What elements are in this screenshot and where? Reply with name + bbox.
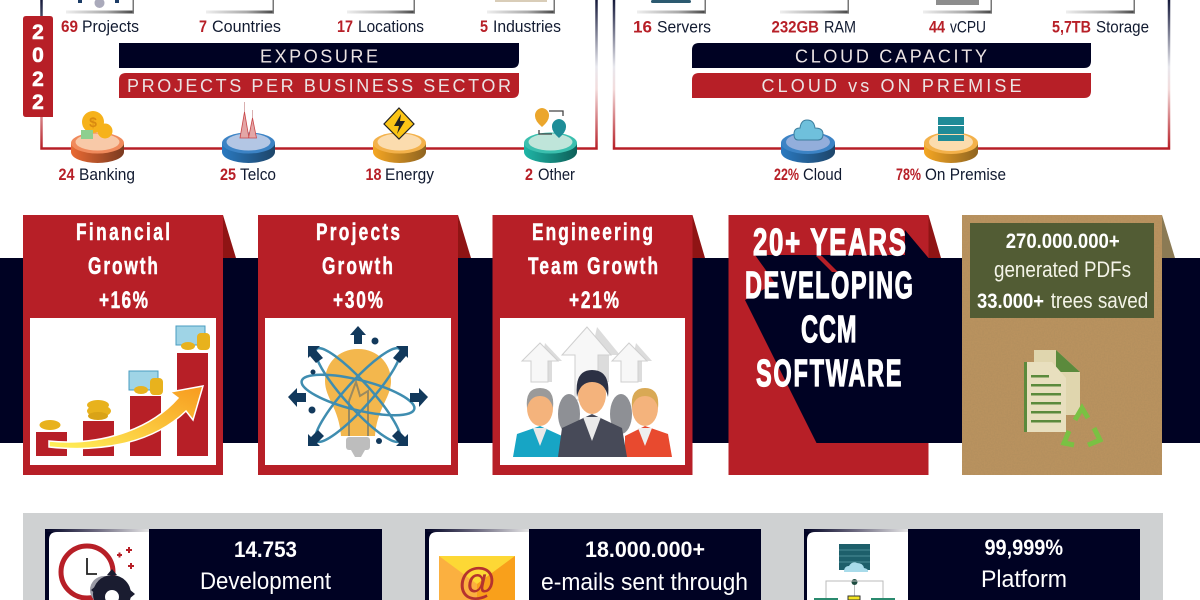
stat: 5,7TB storage: 5,7TB bbox=[1052, 18, 1091, 36]
heading: projects per business sector: PROJECTS PER BUSINESS SECTOR bbox=[127, 76, 511, 96]
card: financial growth: Growth bbox=[88, 253, 158, 280]
navy ribbon band bbox=[0, 258, 1200, 443]
stat: 16 servers bbox=[633, 18, 711, 36]
stat box: platform: Platform bbox=[981, 566, 1067, 593]
disc icon: banking: $ bbox=[89, 114, 97, 130]
stat: 7 countries: Countries bbox=[212, 17, 281, 36]
icon: light bulb with arrows bbox=[288, 326, 428, 457]
stat: 69 projects bbox=[61, 17, 139, 36]
stat box: platform bbox=[804, 529, 1140, 600]
year badge: 0 bbox=[32, 44, 44, 67]
stat box: e-mails: 18.000.000+ bbox=[585, 537, 705, 562]
heading: cloud vs on premise bbox=[692, 73, 1091, 98]
stat: 44 vCPU: vCPU bbox=[950, 18, 986, 36]
stat: 22% cloud: 22% bbox=[774, 165, 799, 184]
stat box: development: Development bbox=[200, 568, 331, 595]
heading: cloud vs on premise: CLOUD vs ON PREMISE bbox=[762, 76, 1022, 96]
stat box: e-mails: e-mails sent through bbox=[541, 569, 748, 596]
heading: cloud capacity: CLOUD CAPACITY bbox=[795, 46, 987, 66]
stat: 18 energy: 18 bbox=[366, 165, 382, 184]
card: financial growth bbox=[23, 215, 236, 475]
stat: 69 projects: 69 bbox=[61, 17, 78, 36]
green stat box bbox=[970, 223, 1154, 318]
icon: email envelope bbox=[439, 556, 515, 600]
disc icon: telco bbox=[222, 102, 275, 163]
card: projects growth: +30% bbox=[333, 287, 383, 314]
stat: 232GB RAM: RAM bbox=[824, 18, 856, 36]
top card: locations bbox=[347, 0, 415, 14]
stat: 78% on premise: On Premise bbox=[925, 165, 1006, 184]
panel: bottom statistics bbox=[23, 513, 1163, 600]
panel: cloud capacity bbox=[614, 0, 1169, 184]
disc icon: cloud bbox=[781, 120, 835, 163]
icon: team with arrows bbox=[513, 327, 672, 457]
icon: network diagram bbox=[814, 544, 895, 600]
stat: 2 other bbox=[525, 165, 575, 184]
icon: recycled documents bbox=[1024, 350, 1100, 445]
card: engineering team growth: Engineering bbox=[532, 219, 653, 246]
panel: exposure bbox=[23, 0, 596, 184]
stat: 16 servers: 16 bbox=[633, 18, 652, 36]
stat box: platform: 99,999% bbox=[984, 535, 1063, 560]
stat: 78% on premise: 78% bbox=[896, 165, 921, 184]
card: generated PDFs and trees saved bbox=[962, 215, 1175, 475]
top card: projects bbox=[66, 0, 134, 14]
card: engineering team growth: +21% bbox=[569, 287, 619, 314]
icon: clock and gear bbox=[61, 546, 135, 600]
stat: 2 other: Other bbox=[538, 165, 575, 184]
stat: 5 industries: Industries bbox=[493, 17, 561, 36]
year badge bbox=[23, 16, 53, 117]
card: projects growth: Projects bbox=[316, 219, 400, 246]
card: 20+ years developing CCM software: 20+ YEARS bbox=[753, 221, 906, 263]
stat: 25 telco: Telco bbox=[240, 165, 276, 184]
stat box: development: 14.753 bbox=[234, 537, 297, 562]
stat: 5,7TB storage bbox=[1052, 18, 1149, 36]
top card: ram bbox=[780, 0, 849, 14]
stat box: development bbox=[45, 529, 382, 600]
disc icon: banking bbox=[71, 111, 124, 163]
heading: cloud capacity bbox=[692, 43, 1091, 68]
stat: 232GB RAM bbox=[772, 18, 856, 36]
card: financial growth: +16% bbox=[99, 287, 148, 314]
stat: 25 telco: 25 bbox=[220, 165, 236, 184]
top card: servers bbox=[637, 0, 706, 14]
stat: 24 banking: Banking bbox=[79, 165, 135, 184]
stat: 24 banking bbox=[58, 165, 135, 184]
card: financial growth: Financial bbox=[76, 219, 170, 246]
stat box: e-mails bbox=[425, 529, 761, 600]
green stat box: 33.000+ bbox=[977, 290, 1044, 313]
heading: exposure bbox=[119, 43, 519, 68]
stat: 25 telco bbox=[220, 165, 276, 184]
card: 20+ years developing CCM software bbox=[728, 215, 941, 475]
stat: 44 vCPU bbox=[929, 18, 986, 36]
stat: 5 industries: 5 bbox=[480, 17, 488, 36]
green stat box: generated PDFs bbox=[994, 257, 1131, 282]
stat: 232GB RAM: 232GB bbox=[772, 18, 819, 36]
stat: 18 energy bbox=[366, 165, 434, 184]
top card: vcpu bbox=[923, 0, 992, 14]
card: engineering team growth: Team Growth bbox=[528, 253, 658, 280]
top card: industries bbox=[487, 0, 555, 14]
stat: 78% on premise bbox=[896, 165, 1006, 184]
top card: storage bbox=[1066, 0, 1135, 14]
stat: 18 energy: Energy bbox=[385, 165, 434, 184]
disc icon: on premise bbox=[924, 117, 978, 163]
year badge: 2 bbox=[32, 21, 44, 44]
disc icon: other bbox=[524, 108, 577, 163]
top card: countries bbox=[206, 0, 274, 14]
stat: 2 other: 2 bbox=[525, 165, 533, 184]
heading: exposure: EXPOSURE bbox=[260, 46, 378, 66]
year badge: 2 bbox=[32, 91, 44, 114]
year badge: 2 bbox=[32, 68, 44, 91]
card: 20+ years developing CCM software: DEVELOPING bbox=[745, 263, 913, 306]
chart: rising bars with coins bbox=[36, 326, 210, 456]
stat: 5,7TB storage: Storage bbox=[1096, 18, 1149, 36]
stat: 17 locations: 17 bbox=[337, 17, 353, 36]
green stat box: trees saved bbox=[1051, 288, 1148, 313]
card: 20+ years developing CCM software: CCM bbox=[801, 307, 856, 350]
stat: 22% cloud bbox=[774, 165, 842, 184]
stat: 16 servers: Servers bbox=[657, 18, 711, 36]
stat: 7 countries: 7 bbox=[199, 17, 207, 36]
green stat box: 270.000.000+ bbox=[1006, 230, 1120, 253]
stat: 44 vCPU: 44 bbox=[929, 18, 945, 36]
card: projects growth: Growth bbox=[322, 253, 393, 280]
card: engineering team growth bbox=[492, 215, 705, 475]
stat: 24 banking: 24 bbox=[58, 165, 75, 184]
disc icon: energy bbox=[373, 108, 426, 163]
stat: 69 projects: Projects bbox=[82, 17, 139, 36]
stat: 17 locations: Locations bbox=[358, 17, 424, 36]
card: projects growth bbox=[258, 215, 471, 475]
stat: 22% cloud: Cloud bbox=[803, 165, 842, 184]
card: 20+ years developing CCM software: SOFTWARE bbox=[756, 351, 902, 394]
